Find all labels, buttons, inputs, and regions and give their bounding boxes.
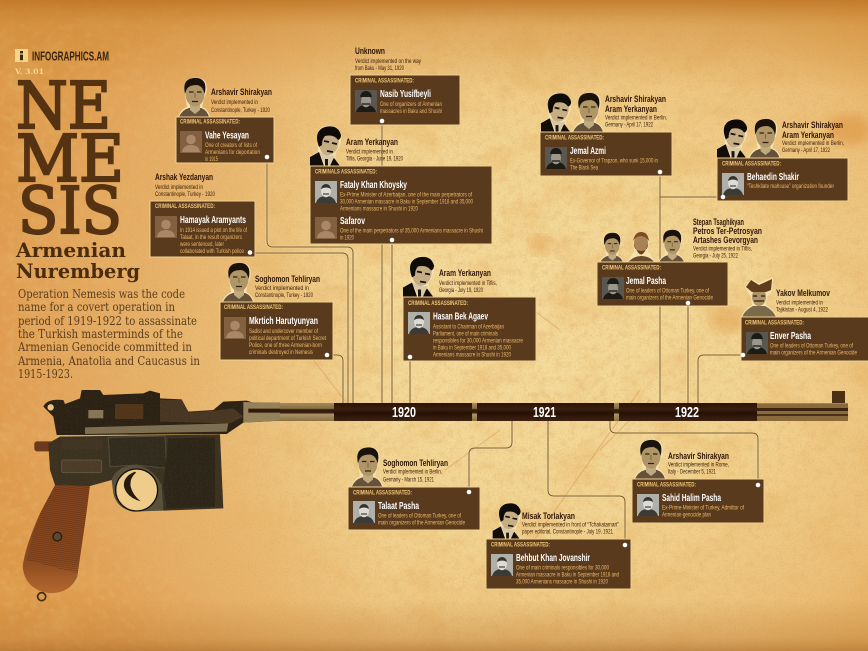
logo: INFOGRAPHICS.AM [32,48,109,64]
entry: Fataly Khan Khoysky and Safarov: Verdict implemented in [346,148,393,156]
entry: Jemal Pasha: main organizers of the Armenian Genocide [626,294,713,302]
entry: Enver Pasha: Enver Pasha [770,331,811,342]
entry: Mkrtich Harutyunyan: CRIMINAL ASSASSINATED: [224,304,283,311]
entry: Behbut Khan Jovanshir [486,503,631,589]
entry: Sahid Halim Pasha: Ex-Prime-Minister of Turkey, Admittor of [662,504,744,512]
entry: Nasib Yusifbeyli [350,46,460,125]
entry: Hasan Bek Agaev: CRIMINAL ASSASSINATED: [408,300,468,307]
entry: Nasib Yusifbeyli: Verdict implemented on the way [355,58,422,65]
entry: Behaedin Shakir [717,118,848,201]
entry: Behbut Khan Jovanshir: Misak Torlakyan [522,511,575,522]
entry: Sahid Halim Pasha: Sahid Halim Pasha [662,493,721,504]
entry: Behbut Khan Jovanshir: 35,000 Armenians massacre in Shushi in 1920 [516,578,608,586]
entry: Enver Pasha: Verdict implemented in [776,300,823,306]
entry: Talaat Pasha: One of leaders of Ottoman Turkey, one of [378,512,461,520]
entry: Behaedin Shakir: Verdict implemented in Berlin, [782,140,844,147]
entry: Jemal Pasha: CRIMINAL ASSASSINATED: [602,264,661,272]
intro paragraph: Armenia, Anatolia and Caucasus in [17,353,200,368]
entry: Mkrtich Harutyunyan: political department of Turkish Secret [249,335,326,342]
entry: Hasan Bek Agaev: Hasan Bek Agaev [433,312,488,322]
entry: Hamayak Aramyants: Constantinople, Turkey - 1920 [155,191,215,198]
entry: Enver Pasha [741,277,868,361]
entry: Vahe Yesayan: Verdict implemented in [211,99,258,106]
timeline [334,403,757,421]
entry: Hamayak Aramyants: Arshak Yezdanyan [155,172,213,183]
entry: Hamayak Aramyants: In 1914 issued a plot on the life of [180,227,247,234]
subtitle: Nuremberg [16,259,140,283]
entry: Hamayak Aramyants: Verdict implemented in [155,184,203,191]
entry: Mkrtich Harutyunyan: Verdict implemented in [255,285,309,292]
timeline: 1922 [675,405,699,421]
entry: Sahid Halim Pasha [632,439,764,523]
entry: Jemal Pasha: One of leaders of Ottoman Turkey, one of [626,288,709,294]
pistol illustration [23,387,848,601]
entry: Vahe Yesayan: CRIMINAL ASSASSINATED: [180,118,240,126]
entry: Jemal Azmi: Ex-Governor of Trapzon, who sunk 15,000 in [570,158,658,164]
entry: Hamayak Aramyants: were sentenced, later [179,241,225,248]
entry: Talaat Pasha: CRIMINAL ASSASSINATED: [353,490,412,496]
entry: Behbut Khan Jovanshir: paper editorial, Constantinople - July 19, 1921 [522,528,613,536]
entry: Jemal Pasha: Artashes Gevorgyan [693,235,758,246]
entry: Sahid Halim Pasha: Armenian-genocide plan [662,512,711,518]
entry: Jemal Pasha: Verdict implemented in Tiflis, [693,246,752,252]
entry: Behaedin Shakir: Arshavir Shirakyan [782,120,843,131]
entry: Fataly Khan Khoysky and Safarov: CRIMINALS ASSASSINATED: [315,168,377,176]
entry: Nasib Yusifbeyli: from Baku - May 31, 1920 [355,65,404,72]
entry: Hamayak Aramyants: CRIMINAL ASSASSINATED: [155,203,215,210]
entry: Jemal Azmi: Aram Yerkanyan [605,104,657,115]
entry: Jemal Azmi: Verdict implemented in Berlin, [605,114,667,122]
intro paragraph: 1915-1923. [18,366,73,381]
entry: Talaat Pasha: Germany - March 15, 1921 [383,476,434,484]
timeline: 1921 [533,405,556,421]
entry: Jemal Azmi: Jemal Azmi [570,146,606,157]
connector lines to the timeline [250,125,758,545]
title: Nemesis [16,69,124,249]
entry: Hasan Bek Agaev: responsibles for 30,000 Armenian massacre [433,338,523,344]
entry: Vahe Yesayan: One of creators of lists of [205,142,257,149]
intro paragraph: period of 1919-1922 to assassinate [18,313,197,328]
entry: Fataly Khan Khoysky and Safarov [310,126,492,244]
entry: Jemal Azmi: Germany - April 17, 1922 [605,122,653,128]
entry: Fataly Khan Khoysky and Safarov: Tiflis, Georgia - June 19, 1920 [346,156,403,162]
entry: Jemal Pasha [597,217,762,306]
timeline: 1920 [392,405,416,421]
entry: Vahe Yesayan: Vahe Yesayan [205,130,249,142]
entry: Nasib Yusifbeyli: Unknown [355,46,385,57]
entry: Jemal Pasha: Jemal Pasha [626,276,666,287]
entry: Jemal Pasha: Petros Ter-Petrosyan [693,226,762,237]
entry: Mkrtich Harutyunyan: Police, one of three Armenian-born [249,342,322,349]
intro paragraph: name for a covert operation in [18,299,175,314]
entry: Fataly Khan Khoysky and Safarov: Fataly Khan Khoysky [340,180,407,191]
entry: Mkrtich Harutyunyan [220,262,333,360]
entry: Behaedin Shakir: “Teshkilate mahsuse” organization founder [747,183,835,190]
entry: Mkrtich Harutyunyan: criminals destroyed in Nemesis [249,349,313,356]
intro paragraph: Armenian Genocide committed in [17,339,192,354]
entry: Vahe Yesayan: Constantinople, Turkey - 1920 [211,107,270,114]
entry: Sahid Halim Pasha: Verdict implemented in Rome, [668,462,729,468]
entry: Hamayak Aramyants: Hamayak Aramyants [180,215,246,226]
entry: Fataly Khan Khoysky and Safarov: Ex-Prime Minister of Azerbaijan, one of the main perpetrators of [340,192,472,198]
entry: Fataly Khan Khoysky and Safarov: 30,000 Armenian massacre in Baku in September 1918 and 35,000 [340,198,473,206]
entry: Hasan Bek Agaev: in Baku in September 1918 and 35,000 [433,344,511,352]
entry: Fataly Khan Khoysky and Safarov: in 1920 [340,234,354,242]
intro paragraph: the Turkish masterminds of the [18,326,183,341]
entry: Behaedin Shakir: Aram Yerkanyan [782,130,834,141]
entry: Behaedin Shakir: CRIMINAL ASSASSINATED: [722,160,781,168]
entry: Nasib Yusifbeyli: One of organizers of Armenian [380,101,442,108]
intro paragraph: Operation Nemesis was the code [18,286,185,301]
entry: Vahe Yesayan: Arshavir Shirakyan [211,87,272,98]
entry: Enver Pasha: CRIMINAL ASSASSINATED: [745,320,804,326]
entry: Enver Pasha: Tajikistan - August 4, 1922 [776,306,828,314]
entry: Mkrtich Harutyunyan: Soghomon Tehliryan [255,274,320,285]
entry: Behbut Khan Jovanshir: Armenian massacre in Baku in September 1918 and [516,572,619,578]
entry: Hasan Bek Agaev: Armenians massacre in Shushi in 1920 [433,352,511,358]
entry: Vahe Yesayan: Armenians for deportation [205,149,260,156]
subtitle [15,238,140,283]
entry: Mkrtich Harutyunyan: Constantinople, Turkey - 1920 [255,292,313,299]
entry: Nasib Yusifbeyli: Nasib Yusifbeyli [380,89,431,100]
entry: Fataly Khan Khoysky and Safarov: Armenians massacre in Shushi in 1920 [340,206,418,212]
entry: Hasan Bek Agaev: Aram Yerkanyan [439,268,491,279]
entry: Vahe Yesayan [176,77,274,163]
entry: Behbut Khan Jovanshir: Behbut Khan Jovanshir [516,553,590,564]
entry: Fataly Khan Khoysky and Safarov: Aram Yerkanyan [346,137,398,148]
entry: Behaedin Shakir: Germany - April 17, 1922 [782,147,830,154]
logo [15,48,109,64]
entry: Jemal Azmi: CRIMINAL ASSASSINATED: [545,134,604,142]
entry: Enver Pasha: Yakov Melkumov [776,288,831,299]
version label: V. 3.01 [14,67,44,76]
entry: Talaat Pasha: Verdict implemented in Berlin, [383,468,442,476]
entry: Talaat Pasha: main organizers of the Armenian Genocide [378,520,465,526]
entry: Behaedin Shakir: Behaedin Shakir [747,172,799,183]
entry: Vahe Yesayan: in 1915 [205,156,218,163]
entry: Hasan Bek Agaev [403,256,536,361]
entry: Sahid Halim Pasha: Italy - December 5, 1921 [668,468,716,476]
entry: Jemal Pasha: Georgia - July 25, 1922 [693,252,738,260]
entry: Jemal Azmi: Arshavir Shirakyan [605,94,666,105]
entry: Jemal Azmi: The Black Sea [570,164,598,172]
title: Nemesis: NE [16,69,111,144]
entry: Behbut Khan Jovanshir: One of main criminals responsibles for 30,000 [516,564,609,572]
entry: Nasib Yusifbeyli: CRIMINAL ASSASSINATED: [355,78,414,84]
entry: Hamayak Aramyants [150,172,255,257]
entry: Hasan Bek Agaev: Parliament, one of main criminals [433,330,498,338]
entry: Jemal Pasha: Stepan Tsaghikyan [693,217,744,228]
title: Nemesis: ME [16,122,124,197]
entry: Fataly Khan Khoysky and Safarov: One of the main perpetrators of 35,000 Armenians massacre in Shushi [340,228,483,234]
entry: Mkrtich Harutyunyan: Mkrtich Harutyunyan [249,316,318,327]
entry: Hamayak Aramyants: collaborated with Turkish police [180,248,244,255]
entry: Talaat Pasha: Soghomon Tehliryan [383,458,448,469]
entry: Mkrtich Harutyunyan: Sadist and undercover member of [249,328,318,335]
subtitle: Armenian [15,238,126,262]
entry: Talaat Pasha [348,447,480,530]
entry: Hasan Bek Agaev: Assistant to Chairman of Azerbaijan [433,324,504,330]
entry: Hasan Bek Agaev: Verdict implemented in Tiflis, [439,280,497,287]
entry: Sahid Halim Pasha: Arshavir Shirakyan [668,451,729,462]
entry: Hasan Bek Agaev: Georgia - July 19, 1920 [439,287,483,294]
entry: Jemal Azmi [540,92,672,176]
entry: Hamayak Aramyants: Talaat, in the result organizers [180,234,242,241]
entry: Talaat Pasha: Talaat Pasha [378,501,419,512]
entry: Sahid Halim Pasha: CRIMINAL ASSASSINATED: [637,482,696,488]
entry: Behbut Khan Jovanshir: Verdict implemented in front of “Tchakatamart” [522,522,619,528]
entry: Fataly Khan Khoysky and Safarov: Safarov [340,216,365,227]
entry: Behbut Khan Jovanshir: CRIMINAL ASSASSINATED: [491,542,550,548]
intro paragraph [17,286,200,381]
title: Nemesis: SIS [18,174,122,249]
entry: Nasib Yusifbeyli: massacres in Baku and Shushi [380,108,442,115]
